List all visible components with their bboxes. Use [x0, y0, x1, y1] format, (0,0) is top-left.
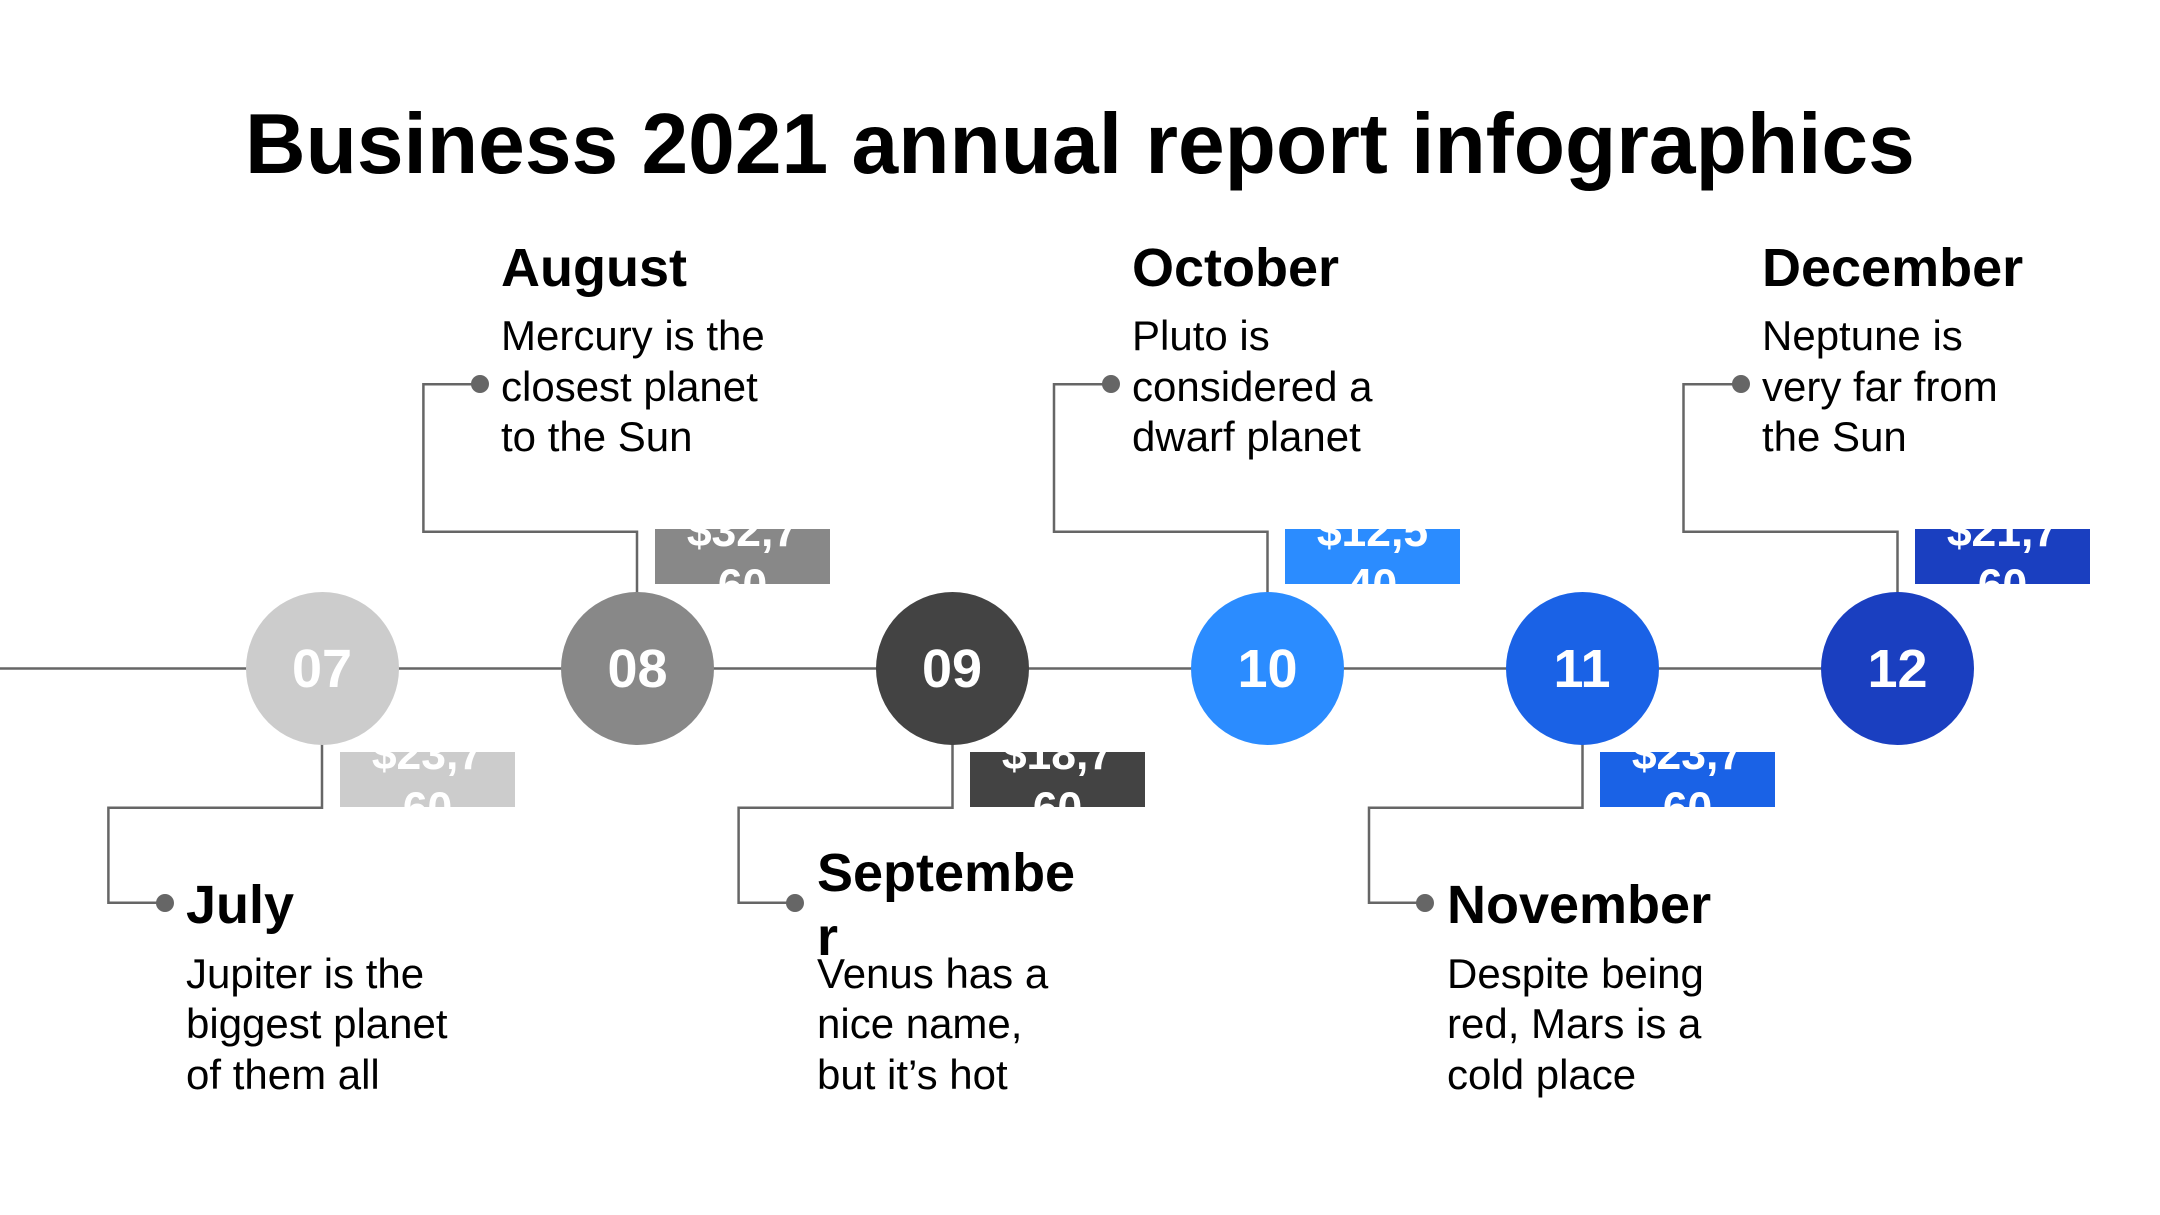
circle 10 [1191, 592, 1344, 745]
text block: July [186, 875, 448, 1098]
description: August: closest planet [501, 362, 758, 410]
text block: December [1762, 238, 2023, 460]
heading: September [817, 843, 1075, 967]
circle 12 [1821, 592, 1974, 745]
circle 07 [246, 592, 398, 745]
description: September: nice name, [817, 1000, 1022, 1047]
value badge: August [655, 529, 830, 584]
title: Business 2021 annual report infographics [244, 97, 1914, 192]
circle 08 [561, 592, 714, 745]
description: July [186, 950, 448, 1098]
description: July: Jupiter is the [186, 950, 424, 996]
description: August: to the Sun [501, 413, 692, 460]
circle 07: 07 [292, 639, 352, 699]
text block: November [1447, 875, 1711, 1098]
description: August [501, 312, 765, 460]
description: October: Pluto is [1132, 312, 1270, 359]
description: July: of them all [186, 1050, 380, 1098]
description: September: Venus has a [817, 950, 1048, 996]
connector dot: October [1102, 375, 1120, 393]
value badge: September [970, 752, 1145, 807]
connector dot: November [1416, 894, 1434, 912]
description: December: very far from [1762, 362, 1998, 410]
description: October [1132, 312, 1372, 460]
text block: September [817, 843, 1075, 1098]
description: November: cold place [1447, 1050, 1636, 1098]
description: November: red, Mars is a [1447, 1000, 1701, 1047]
circle 09: 09 [922, 639, 982, 699]
value badge: July [340, 752, 515, 807]
circle 10: 10 [1237, 639, 1298, 699]
connector dot: August [471, 375, 489, 393]
description: December [1762, 312, 1998, 460]
description: October: dwarf planet [1132, 413, 1361, 460]
description: December: Neptune is [1762, 312, 1963, 359]
description: October: considered a [1132, 362, 1372, 410]
value badge: December [1915, 529, 2090, 584]
text block: October [1132, 238, 1372, 460]
description: August: Mercury is the [501, 312, 765, 359]
heading: November: November [1447, 875, 1711, 935]
heading: October: October [1132, 238, 1339, 298]
connector dot: July [156, 894, 174, 912]
circle 08: 08 [607, 639, 668, 699]
circle 11 [1506, 592, 1658, 745]
heading: September: r [817, 907, 838, 967]
circle 09 [876, 592, 1028, 745]
connector dot: December [1732, 375, 1750, 393]
text block: August [501, 238, 765, 460]
description: July: biggest planet [186, 1000, 448, 1047]
connector dot: September [786, 894, 804, 912]
value badge: October [1285, 529, 1460, 584]
heading: July: July [186, 875, 294, 935]
description: September: but it’s hot [817, 1050, 1008, 1098]
heading: August: August [501, 238, 687, 298]
description: December: the Sun [1762, 413, 1907, 460]
circle 11: 11 [1553, 639, 1611, 699]
heading: December: December [1762, 238, 2023, 298]
heading: September: Septembe [817, 843, 1075, 903]
description: September [817, 950, 1048, 1098]
value badge: November [1600, 752, 1775, 807]
circle 12: 12 [1867, 639, 1928, 699]
description: November [1447, 950, 1704, 1098]
description: November: Despite being [1447, 950, 1704, 996]
